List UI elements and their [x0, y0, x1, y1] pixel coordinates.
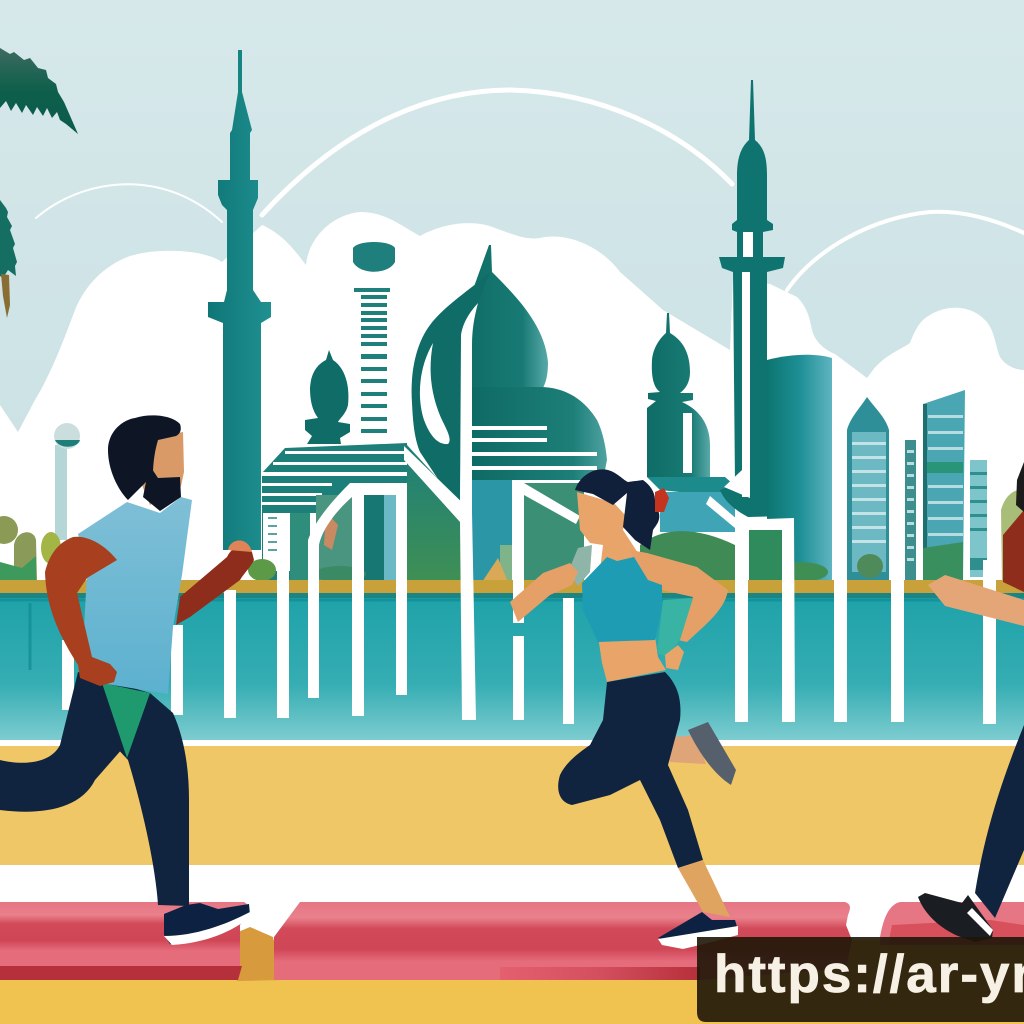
white kerb	[0, 740, 1024, 746]
left shrubs	[0, 516, 61, 580]
right hand	[228, 540, 252, 552]
t-shirt	[78, 497, 192, 694]
rear hand	[665, 645, 684, 670]
hair tie	[655, 488, 669, 512]
right minaret	[719, 80, 785, 517]
mat centre	[274, 902, 852, 980]
midriff	[598, 636, 666, 682]
palm frond: lower	[0, 200, 17, 278]
right dome	[647, 313, 710, 477]
front leg	[78, 672, 189, 906]
stepped building stripes	[262, 451, 407, 571]
short striped tower	[970, 460, 987, 577]
runner right	[918, 462, 1024, 942]
right minaret white details	[724, 232, 753, 498]
main dome left shell	[412, 272, 490, 512]
sky background	[0, 0, 1024, 620]
right arm	[176, 545, 254, 625]
white railing	[62, 446, 996, 724]
stepped building	[262, 443, 407, 580]
white stripe	[0, 865, 1024, 940]
left arm	[45, 537, 117, 686]
red mats	[0, 902, 1024, 980]
crescent	[420, 343, 450, 444]
water	[0, 598, 1024, 741]
palm frond: upper	[0, 48, 78, 134]
mat shadow	[200, 927, 282, 981]
leggings	[558, 672, 703, 868]
head	[140, 432, 184, 505]
crop top	[582, 557, 662, 642]
lower dome stripes	[472, 426, 597, 470]
front arm	[510, 563, 578, 622]
back ankle	[665, 735, 706, 764]
back arm and shoulder	[630, 550, 728, 642]
right dome base and hill	[640, 477, 740, 582]
mat left	[0, 902, 248, 966]
shoreline	[0, 580, 1024, 598]
watermark: https://ar-yr	[714, 945, 1024, 1004]
left minaret	[208, 50, 271, 550]
runner centre	[510, 469, 738, 949]
beard	[143, 466, 181, 511]
cylinder tower	[767, 355, 832, 582]
hip accent	[102, 683, 150, 758]
mat right	[880, 902, 1024, 945]
palm trunk	[1, 274, 10, 318]
tall glass tower	[923, 390, 965, 582]
left lamp post	[54, 423, 80, 540]
striped tower bands	[354, 288, 390, 433]
mosque interior glass	[290, 445, 462, 580]
lower dome	[472, 387, 607, 480]
narrow tower	[905, 440, 916, 582]
torso	[1003, 510, 1024, 592]
mat centre dark edge	[500, 967, 700, 980]
phone	[568, 545, 592, 586]
arm	[928, 575, 1024, 626]
head	[1016, 462, 1024, 512]
lower yellow ground	[0, 940, 1024, 1024]
shoe	[658, 912, 738, 946]
sky arcs	[36, 90, 1024, 290]
main dome	[462, 245, 548, 388]
promenade shrubs	[248, 559, 828, 582]
back foot	[688, 722, 736, 785]
shoe	[918, 893, 993, 942]
legs	[975, 725, 1024, 918]
watermark	[697, 937, 1024, 1022]
seawall panel	[0, 600, 1024, 670]
ankle	[678, 860, 730, 917]
skyline	[208, 50, 1024, 582]
neck and face	[577, 492, 650, 570]
back leg	[0, 672, 130, 812]
green infill inside railing frame	[749, 530, 782, 580]
small dome	[305, 350, 350, 444]
small striped block	[268, 517, 288, 551]
green blob at right	[1001, 490, 1024, 582]
yellow path	[0, 746, 1024, 866]
striped tower head	[353, 242, 395, 272]
clouds	[0, 212, 1024, 600]
shoe	[164, 903, 250, 944]
shoe sole	[658, 926, 738, 949]
hair	[108, 415, 181, 500]
glass atrium	[472, 480, 584, 582]
book	[657, 598, 693, 657]
hair	[575, 469, 659, 550]
vertical blade	[460, 303, 478, 505]
shoe sole	[164, 912, 250, 945]
runner left	[0, 415, 254, 945]
shoe stripe	[967, 908, 993, 936]
domed glass tower	[847, 397, 889, 582]
right dome white slot	[683, 413, 692, 473]
